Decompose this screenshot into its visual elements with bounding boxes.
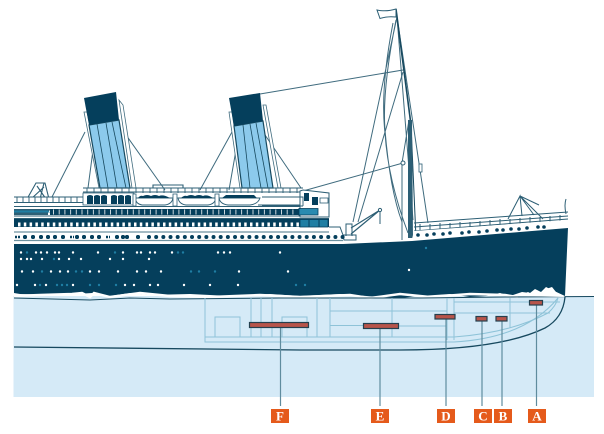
funnel 2 xyxy=(229,93,281,188)
callout C: C xyxy=(478,408,488,424)
callout E xyxy=(364,324,398,424)
bridge front xyxy=(300,190,329,217)
aft docking bridge xyxy=(27,183,49,199)
callout E: E xyxy=(376,408,384,424)
hull windows, white xyxy=(17,252,409,285)
callout C xyxy=(474,316,492,424)
bow ice xyxy=(518,287,565,297)
callout F: F xyxy=(276,408,284,424)
forward well deck step xyxy=(329,227,346,240)
aft and boat deck rails xyxy=(14,185,303,202)
callout B xyxy=(494,316,512,424)
lower deck windows xyxy=(14,219,329,227)
callout F xyxy=(250,322,308,424)
hull xyxy=(14,228,568,298)
flag xyxy=(377,9,396,18)
crane xyxy=(343,208,382,240)
callout D: D xyxy=(441,408,451,424)
funnel 1 xyxy=(84,92,136,188)
deckhouse with arched windows xyxy=(83,193,134,205)
hull windows, teal xyxy=(27,248,426,285)
superstructure xyxy=(14,185,346,241)
callout A xyxy=(528,300,546,424)
bow portholes xyxy=(416,225,546,237)
water panel xyxy=(14,296,594,397)
rigging and stays xyxy=(52,17,428,240)
lifeboats xyxy=(135,198,260,205)
foredeck rail and bow rigging xyxy=(414,196,568,231)
callout A: A xyxy=(532,408,542,424)
bow deck strip xyxy=(412,220,568,239)
callout D xyxy=(435,314,455,424)
main deck portholes xyxy=(15,235,343,239)
foremast xyxy=(396,9,422,238)
promenade deck windows xyxy=(14,209,51,215)
waterline xyxy=(14,293,518,298)
hull outline below water xyxy=(14,297,565,350)
interior compartments xyxy=(205,298,560,342)
callout B: B xyxy=(499,408,508,424)
